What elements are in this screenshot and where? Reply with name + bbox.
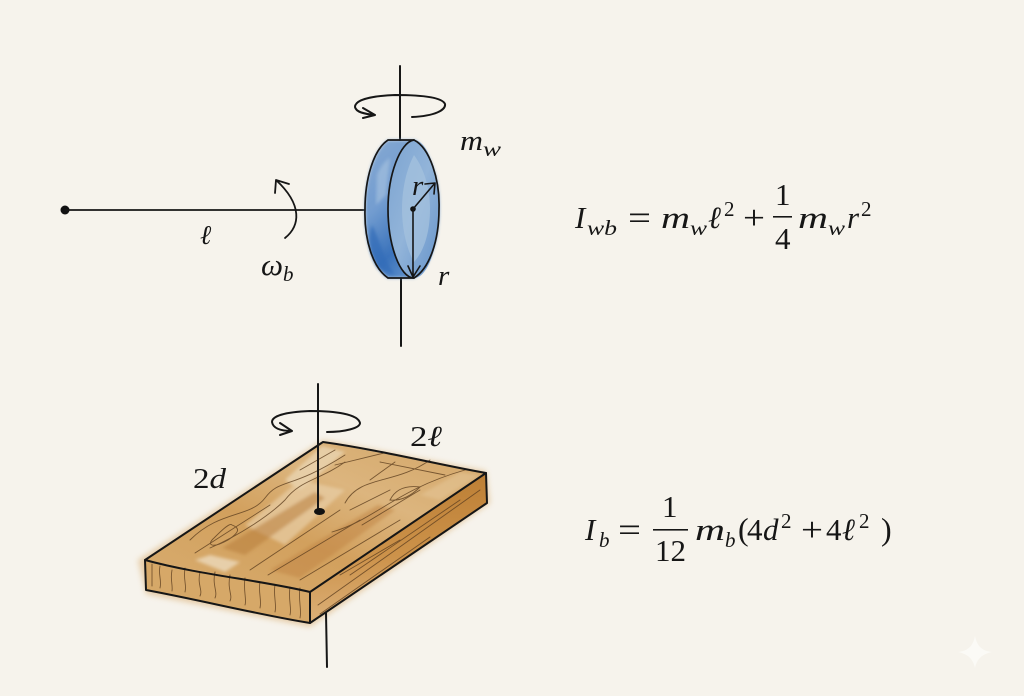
board axis bbox=[318, 384, 327, 667]
board formula: 4 bbox=[826, 512, 842, 547]
icon: corner sparkle bbox=[958, 636, 992, 668]
board front side bbox=[145, 560, 310, 623]
board formula: ( bbox=[738, 511, 749, 547]
wheel centre and radius arrows bbox=[408, 183, 435, 277]
board formula: 12 bbox=[655, 533, 686, 568]
wheel diagram bbox=[60, 66, 501, 346]
arm length label: ℓ bbox=[200, 220, 212, 250]
omega label: b bbox=[283, 262, 294, 286]
wheel spin arrow bbox=[355, 95, 445, 118]
wheel formula: wb bbox=[587, 216, 617, 240]
board formula: I bbox=[584, 512, 597, 547]
board diagram bbox=[138, 384, 490, 667]
wheel formula: = bbox=[628, 200, 651, 237]
board labels: 2d bbox=[193, 463, 227, 495]
board formula: ℓ bbox=[842, 512, 855, 547]
board labels bbox=[193, 421, 442, 495]
wheel axis bbox=[400, 66, 401, 346]
board labels: 2ℓ bbox=[410, 421, 442, 453]
wheel formula: m bbox=[661, 200, 690, 235]
board washes bbox=[138, 440, 490, 627]
wheel body bbox=[365, 140, 439, 278]
wheel formula: w bbox=[828, 216, 845, 240]
board formula: m bbox=[695, 512, 725, 547]
wheel formula: I bbox=[574, 200, 587, 235]
wheel formula: 1 bbox=[775, 177, 790, 212]
wheel formula: 2 bbox=[861, 197, 872, 221]
board formula: d bbox=[763, 512, 779, 547]
wheel labels: r bbox=[412, 170, 424, 202]
omega label: ω bbox=[261, 247, 283, 282]
board formula: b bbox=[599, 528, 610, 552]
wheel labels bbox=[412, 125, 501, 292]
board formula: + bbox=[801, 512, 823, 549]
arm line bbox=[65, 209, 365, 211]
wheel formula: + bbox=[743, 200, 765, 237]
board outlines bbox=[145, 442, 487, 623]
board formula: 4 bbox=[747, 512, 763, 547]
board formula: b bbox=[725, 528, 736, 552]
pivot point bbox=[60, 206, 70, 214]
board formula: 2 bbox=[781, 509, 792, 533]
wheel labels: r bbox=[438, 260, 450, 292]
wheel formula: w bbox=[690, 216, 707, 240]
wheel formula: r bbox=[847, 200, 860, 235]
board formula: ) bbox=[881, 511, 892, 547]
board formula: 1 bbox=[662, 489, 678, 524]
angular velocity arrow bbox=[275, 180, 296, 238]
wood grain front bbox=[152, 564, 301, 618]
wheel formula bbox=[574, 177, 872, 256]
wheel labels: m bbox=[460, 125, 483, 157]
board highlights bbox=[195, 446, 480, 578]
wheel formula: 2 bbox=[724, 197, 734, 221]
wheel formula: 4 bbox=[775, 221, 791, 256]
board right side bbox=[310, 473, 487, 623]
wheel formula: ℓ bbox=[708, 200, 721, 235]
board formula bbox=[584, 489, 892, 568]
board formula: = bbox=[618, 512, 641, 549]
board spin arrow bbox=[272, 411, 360, 435]
board centre dot bbox=[314, 508, 325, 515]
wheel formula: m bbox=[798, 200, 828, 235]
wood grain side bbox=[318, 490, 480, 614]
board formula: 2 bbox=[859, 509, 870, 533]
wheel labels: w bbox=[483, 137, 501, 161]
board top face bbox=[145, 442, 486, 592]
wood grain top bbox=[190, 450, 465, 580]
omega label bbox=[261, 247, 294, 286]
